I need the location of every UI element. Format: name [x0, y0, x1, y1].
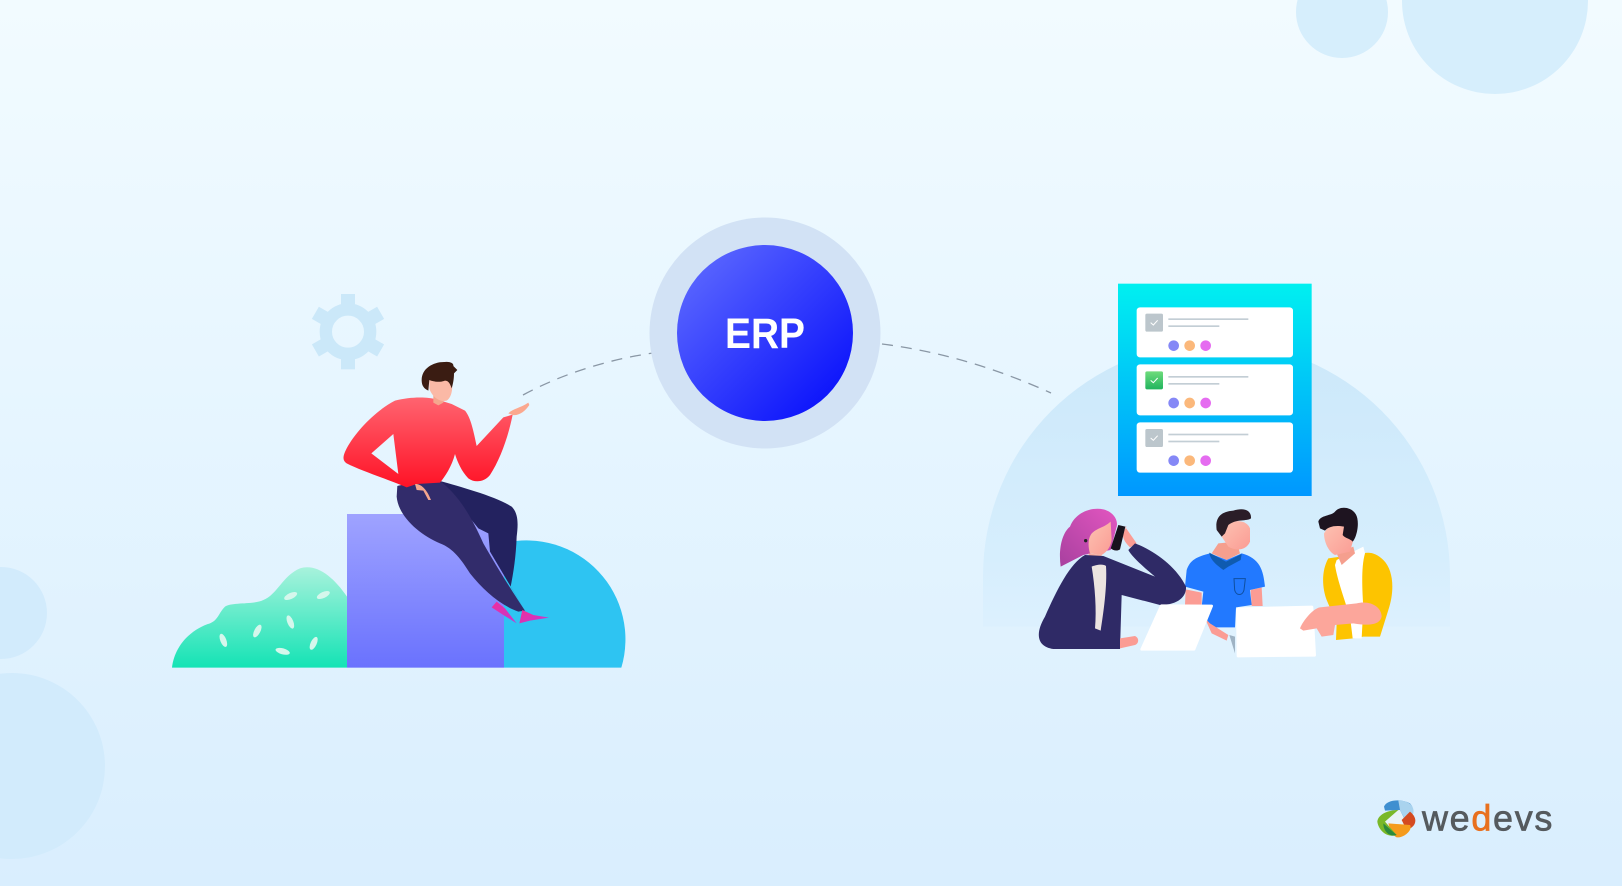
badge disc: [677, 245, 853, 421]
right scene: team and task board: [983, 284, 1450, 656]
ERP label: ERP: [725, 310, 805, 358]
dashed connector left: [523, 353, 653, 395]
man in yellow cardigan: [1318, 508, 1392, 640]
blue half circle: [504, 540, 625, 668]
task row 1: [1137, 307, 1293, 357]
front leg: [397, 481, 525, 612]
decorative circles top right: [1296, 0, 1588, 94]
task row 2: [1137, 364, 1293, 415]
green bush: [172, 567, 347, 668]
pale dome: [983, 342, 1450, 627]
woman on the phone: [1039, 509, 1186, 649]
purple block: [347, 514, 504, 668]
icon: gear: [312, 294, 384, 369]
back leg: [440, 481, 525, 611]
laptop left: [1142, 606, 1212, 649]
task row 3: [1137, 422, 1293, 473]
dashed connector right: [882, 344, 1051, 393]
hand on hip: [415, 484, 431, 500]
sweater: [344, 397, 513, 487]
raised hand: [508, 403, 529, 415]
man in blue shirt: [1185, 509, 1265, 653]
left scene: man sitting on block: [172, 294, 625, 668]
logo mark: [1377, 800, 1415, 837]
wedevs logo: [1377, 798, 1554, 839]
hair: [422, 362, 457, 391]
logo wordmark: wedevs: [1421, 798, 1554, 839]
man figure: [344, 362, 549, 623]
shoes: [492, 602, 549, 623]
neck: [433, 395, 443, 405]
laptop right: [1237, 607, 1315, 656]
pointing arm: [1300, 602, 1382, 637]
face: [429, 378, 452, 401]
task board: [1118, 284, 1312, 496]
decorative circles bottom left: [0, 567, 105, 859]
badge halo: [650, 218, 880, 448]
ERP badge: [650, 218, 880, 448]
